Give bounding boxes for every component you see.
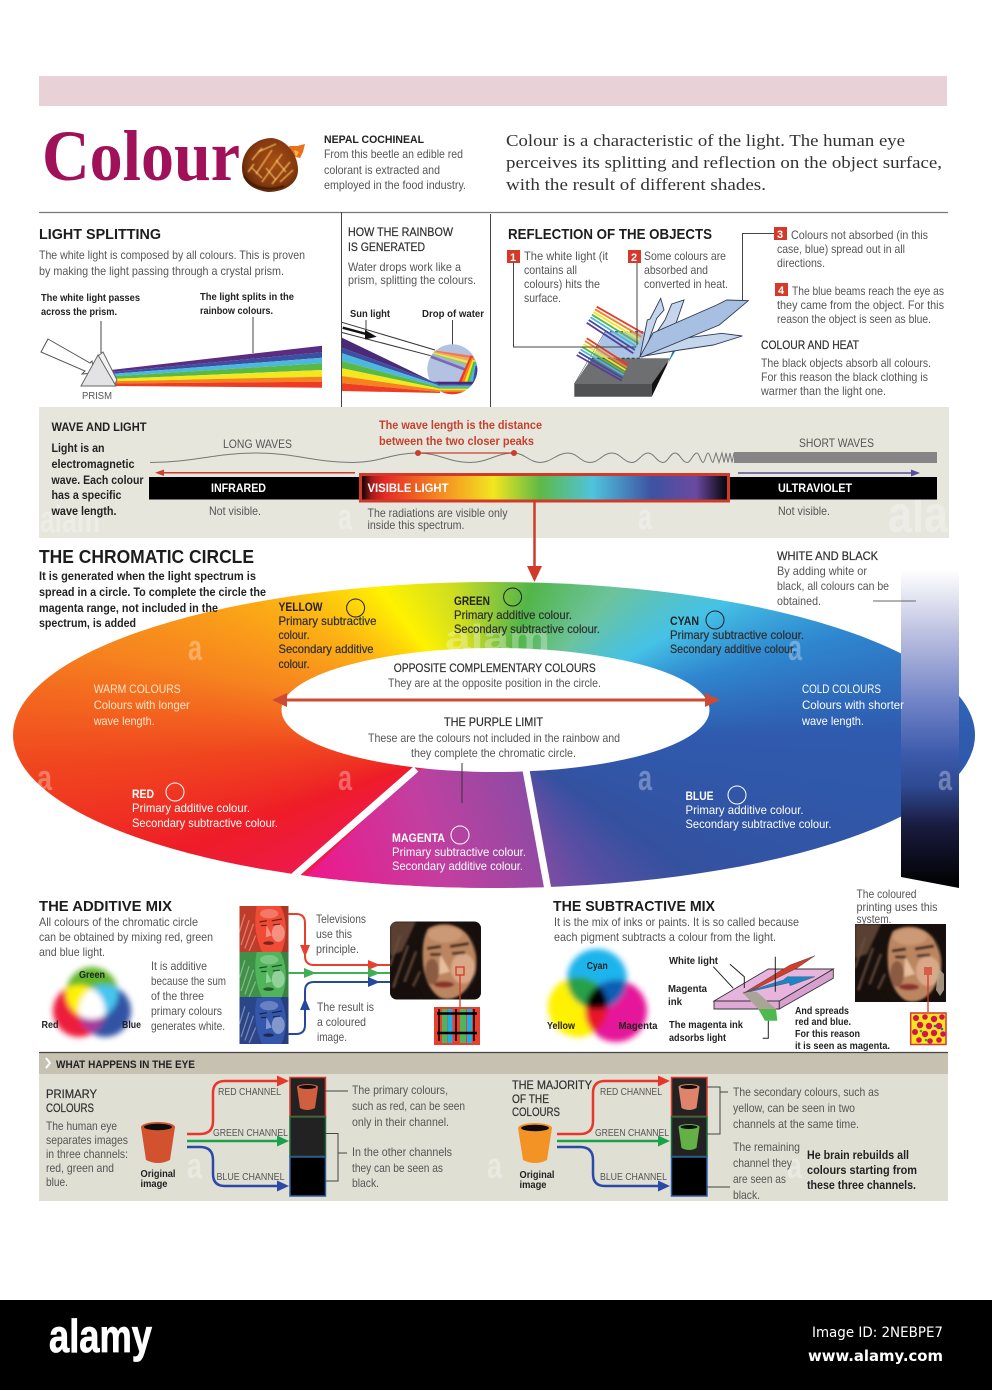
notes right: are seen as [733, 1172, 786, 1186]
chart: additive circles [42, 967, 141, 1037]
inner ellipse [282, 648, 710, 772]
text block: wave. Each colour [51, 473, 144, 487]
icon: chevron [46, 1058, 50, 1068]
channel labels right [595, 1086, 669, 1183]
label: cyan: Secondary additive colour. [670, 642, 796, 656]
label: yellow: Primary subtractive [278, 614, 377, 628]
icon: orange bucket [518, 1123, 555, 1191]
sun beam [342, 322, 435, 356]
heading: THE CHROMATIC CIRCLE [39, 547, 254, 567]
watermark [187, 1145, 803, 1186]
colour and heat: COLOUR AND HEAT [761, 338, 860, 352]
colour and heat: For this reason the black clothing is [761, 370, 928, 384]
callout: brain: colours starting from [807, 1163, 917, 1177]
channel labels right: BLUE CHANNEL [600, 1171, 667, 1183]
opposite complementary: OPPOSITE COMPLEMENTARY COLOURS [394, 661, 596, 675]
text: nepal cochineal: NEPAL COCHINEAL [324, 134, 424, 146]
pink title band [39, 76, 947, 106]
text: nepal cochineal: colorant is extracted and [324, 163, 440, 177]
channel boxes right [672, 1078, 707, 1196]
notes right: The secondary colours, such as [733, 1085, 879, 1099]
watermark: a [188, 627, 203, 668]
warm colours: wave length. [93, 714, 155, 728]
label: blue: Primary additive colour. [686, 803, 804, 817]
step 2: converted in heat. [644, 277, 728, 291]
magenta wedge [306, 769, 544, 888]
watermark: a [338, 757, 353, 798]
notes right: The remaining [733, 1140, 800, 1154]
heading: REFLECTION OF THE OBJECTS [508, 226, 712, 243]
notes right: yellow, can be seen in two [733, 1101, 855, 1115]
callout: brain [807, 1148, 917, 1192]
text block: spread in a circle. To complete the circle the [39, 585, 266, 599]
label: magenta: Primary subtractive colour. [392, 845, 526, 859]
label: red [132, 783, 278, 830]
title: Colour [42, 116, 240, 196]
white and black: obtained. [777, 594, 821, 608]
chart: additive circles: Red [42, 1020, 58, 1031]
channel labels left: GREEN CHANNEL [213, 1127, 288, 1139]
purple limit gaps [294, 769, 548, 890]
white and black: black, all colours can be [777, 579, 889, 593]
chart: additive circles: Green [79, 970, 105, 981]
spectrum captions: Not visible. [778, 504, 830, 518]
label: magenta: MAGENTA [392, 831, 445, 845]
primary colours text: in three channels: [46, 1147, 128, 1161]
watermark: ala [888, 486, 949, 544]
text block: spectrum, is added [39, 616, 136, 630]
tinted face strips [240, 906, 288, 1044]
watermark [37, 617, 953, 798]
channel boxes left [290, 1078, 326, 1196]
watermark: a [37, 757, 53, 798]
channel labels left [213, 1086, 288, 1183]
step 1: contains all [524, 263, 577, 277]
labels: plate: Magenta [668, 983, 707, 995]
labels [350, 308, 484, 345]
arrow: opposite colours [272, 693, 720, 707]
panel: additive mix [39, 898, 481, 1045]
icon: orange bucket: Original [520, 1170, 555, 1181]
purple limit: they complete the chromatic circle. [411, 746, 576, 760]
chart: subtractive circles: Magenta [618, 1021, 658, 1032]
text block [348, 260, 476, 287]
labels: plate: And spreads [795, 1005, 849, 1017]
callout: splits: rainbow colours. [200, 305, 273, 317]
channel labels left: RED CHANNEL [218, 1086, 281, 1098]
labels: plate: it is seen as magenta. [795, 1040, 890, 1052]
majority heading: THE MAJORITY [512, 1078, 592, 1092]
chart: subtractive circles [547, 949, 658, 1042]
panel: light splitting [39, 226, 322, 402]
text: televisions: principle. [316, 942, 359, 956]
icon: red bucket: image [140, 1179, 168, 1190]
text block [39, 915, 213, 959]
text block: by making the light passing through a crystal prism. [39, 264, 284, 278]
arrow: ultraviolet direction [738, 470, 920, 476]
spectrum bar: VISIBLE LIGHT [368, 481, 449, 495]
labels: Sun light [350, 308, 390, 320]
text block [39, 248, 305, 278]
text block: magenta range, not included in the [39, 601, 218, 615]
text: printing: printing uses this [856, 900, 938, 914]
text: additive note: generates white. [151, 1019, 225, 1033]
step 4: The blue beams reach the eye as [792, 284, 944, 298]
text: additive note: primary colours [151, 1004, 222, 1018]
heading: WHAT HAPPENS IN THE EYE [56, 1059, 195, 1071]
wave line [150, 450, 937, 463]
channel labels left: BLUE CHANNEL [216, 1171, 285, 1183]
text block: Water drops work like a [348, 260, 461, 274]
notes left: The primary colours, [352, 1083, 448, 1097]
spectrum captions: Not visible. [209, 504, 261, 518]
step 4: 4 [778, 285, 785, 297]
callout: white light [41, 292, 140, 357]
text: televisions: use this [316, 927, 352, 941]
colour and heat: The black objects absorb all colours. [761, 356, 931, 370]
white and black: By adding white or [777, 564, 867, 578]
text block [39, 569, 266, 630]
white and black [777, 549, 916, 608]
labels: plate: For this reason [795, 1028, 860, 1040]
callout: wave length: The wave length is the distance [379, 418, 542, 432]
text: nepal cochineal: employed in the food industry. [324, 178, 466, 192]
spectrum beam [111, 346, 322, 388]
callout: white light: The white light passes [41, 292, 140, 304]
text block: wave length. [51, 504, 117, 518]
labels: plate: The magenta ink [669, 1019, 743, 1031]
step 2: 2 [631, 252, 637, 264]
heading: IS GENERATED [348, 240, 425, 254]
footer logo: alamy [49, 1310, 152, 1362]
label: magenta: Secondary additive colour. [392, 859, 523, 873]
icon: red bucket: Original [140, 1169, 176, 1180]
arrows: rgb channels [288, 914, 390, 1034]
callout: splits [200, 291, 294, 353]
notes left [325, 1083, 465, 1190]
photo: colour face [390, 922, 481, 1000]
step 3: Colours not absorbed (in this [791, 228, 928, 242]
spectrum captions: inside this spectrum. [368, 518, 464, 532]
text: printing [856, 887, 938, 926]
panel: what happens in the eye [39, 1052, 948, 1202]
prism [81, 352, 117, 402]
arrows: channels right [557, 1076, 670, 1192]
footer bar [0, 1300, 992, 1390]
primary colours text: The human eye [46, 1119, 117, 1133]
text: result [317, 1000, 374, 1044]
labels: plate [668, 955, 890, 1052]
primary colours text: blue. [46, 1175, 68, 1189]
step 4: they came from the object. For this [777, 298, 944, 312]
arrow: from spectrum [527, 502, 542, 582]
watermark: a [487, 1145, 503, 1186]
text: nepal cochineal: From this beetle an edible red [324, 147, 463, 161]
step 4 [775, 283, 944, 326]
notes left: such as red, can be seen [352, 1099, 465, 1113]
step 3: case, blue) spread out in all [777, 242, 905, 256]
channel labels right: GREEN CHANNEL [595, 1127, 669, 1139]
text block: has a specific [52, 488, 122, 502]
arrow: infrared direction [155, 470, 355, 476]
step 2: absorbed and [644, 263, 708, 277]
illustration: ink plate [713, 956, 833, 1038]
label: yellow: colour. [278, 657, 310, 671]
text: result: a coloured [317, 1015, 366, 1029]
label: cyan [670, 611, 804, 656]
colour and heat [760, 338, 931, 398]
majority heading: COLOURS [512, 1105, 560, 1119]
spectrum captions [209, 504, 830, 532]
panel: reflection [507, 226, 944, 398]
primary colours text: COLOURS [46, 1101, 94, 1115]
watermark: alam [40, 499, 100, 541]
cold colours [801, 682, 904, 728]
notes left: black. [352, 1176, 379, 1190]
icon: red bucket [140, 1122, 176, 1190]
watermark: a [638, 496, 653, 537]
cold colours: wave length. [801, 714, 864, 728]
heading: THE ADDITIVE MIX [39, 898, 172, 915]
callout: white light: across the prism. [41, 306, 117, 318]
warm colours [93, 682, 190, 728]
label: green [454, 588, 600, 636]
intro text: with the result of different shades. [506, 175, 766, 194]
labels: plate: ink [668, 996, 682, 1008]
heading: LIGHT SPLITTING [39, 226, 161, 243]
wave labels: LONG WAVES [223, 437, 292, 451]
callout: brain: He brain rebuilds all [807, 1148, 909, 1162]
halftone magnifier [911, 967, 946, 1044]
step 2: Some colours are [644, 249, 726, 263]
spectrum bar [149, 474, 937, 501]
step 3: 3 [777, 229, 783, 241]
purple limit: THE PURPLE LIMIT [444, 715, 544, 729]
header [42, 116, 942, 196]
labels: plate: White light [669, 955, 718, 967]
icon: orange bucket: image [520, 1180, 547, 1191]
rainbow spectrum [342, 338, 478, 395]
callout: wave length: between the two closer peaks [379, 434, 534, 448]
label: green: Secondary subtractive colour. [454, 622, 600, 636]
primary colours text [46, 1087, 128, 1189]
text: additive note: It is additive [151, 959, 207, 973]
wave labels: SHORT WAVES [799, 436, 874, 450]
wave labels [223, 436, 874, 451]
footer url: www.alamy.com [808, 1347, 943, 1365]
notes right: black. [733, 1188, 760, 1202]
label: yellow [278, 599, 377, 671]
label: blue: Secondary subtractive colour. [686, 817, 832, 831]
label: red: RED [132, 787, 154, 801]
text: televisions: Televisions [316, 912, 366, 926]
footer image id: Image ID: 2NEBPE7 [812, 1325, 943, 1341]
step 1: 1 [510, 252, 516, 264]
heading: THE SUBTRACTIVE MIX [553, 898, 715, 915]
text block: and blue light. [39, 945, 105, 959]
labels: plate: adsorbs light [669, 1032, 726, 1044]
notes left: In the other channels [352, 1145, 452, 1159]
watermark: a [338, 496, 353, 537]
primary colours text: red, green and [46, 1161, 114, 1175]
step 1 [507, 249, 636, 347]
labels: plate: red and blue. [795, 1016, 851, 1028]
step 3: directions. [777, 256, 825, 270]
step 1: surface. [524, 291, 561, 305]
watermark: a [788, 627, 803, 668]
step 3 [742, 227, 928, 300]
text: result: The result is [317, 1000, 374, 1014]
label: cyan: CYAN [670, 614, 699, 628]
icon: cochineal beetle [242, 138, 305, 192]
text: additive note: of the three [151, 989, 204, 1003]
text: additive note [151, 959, 226, 1033]
heading: WAVE AND LIGHT [52, 420, 147, 434]
white and black: WHITE AND BLACK [777, 549, 878, 563]
callout: brain: these three channels. [807, 1178, 916, 1192]
notes left: they can be seen as [352, 1161, 443, 1175]
heading: HOW THE RAINBOW [348, 225, 454, 239]
purple limit [368, 715, 620, 803]
heading [348, 225, 454, 254]
watermark: a [638, 757, 653, 798]
arrows: channels left [187, 1076, 289, 1192]
panel: wave and light [39, 407, 949, 544]
callout: wave length [379, 418, 542, 448]
label: yellow: colour. [278, 628, 310, 642]
opposite complementary: They are at the opposite position in the circle. [388, 676, 601, 690]
panel: subtractive mix [547, 887, 946, 1052]
intro text: Colour is a characteristic of the light. The human eye [506, 131, 905, 150]
text: result: image. [317, 1030, 347, 1044]
step 1: The white light (it [524, 249, 609, 263]
label: yellow: Secondary additive [278, 642, 374, 656]
step 4: reason the object is seen as blue. [777, 312, 931, 326]
primary colours text: separates images [46, 1133, 128, 1147]
label: blue [686, 786, 832, 831]
text block: prism, splitting the colours. [348, 273, 476, 287]
majority heading: OF THE [512, 1092, 549, 1106]
label: green: Primary additive colour. [454, 608, 572, 622]
chart: subtractive circles: Cyan [587, 961, 608, 972]
text block: each pigment subtracts a colour from the light. [554, 930, 776, 944]
arrow: incoming white light [41, 339, 94, 374]
notes left: only in their channel. [352, 1115, 449, 1129]
photo: printed face [855, 924, 946, 1002]
watermark: a [187, 1145, 203, 1186]
intro text [506, 131, 942, 194]
water drop [427, 344, 478, 394]
labels: Drop of water [422, 308, 484, 320]
notes right [707, 1085, 879, 1202]
text: televisions [316, 912, 366, 956]
cold colours: Colours with shorter [802, 698, 904, 712]
pixel magnifier [434, 967, 480, 1045]
panel: chromatic circle [37, 502, 959, 892]
chromatic ring [13, 582, 975, 888]
label: cyan: Primary subtractive colour. [670, 628, 804, 642]
text block: All colours of the chromatic circle [39, 915, 198, 929]
purple limit: These are the colours not included in the rainbow and [368, 731, 620, 745]
spectrum captions: The radiations are visible only [368, 506, 508, 520]
text block: can be obtained by mixing red, green [39, 930, 213, 944]
majority heading [512, 1078, 592, 1119]
colour and heat: warmer than the light one. [760, 384, 886, 398]
primary colours text: PRIMARY [46, 1087, 97, 1101]
text block: It is the mix of inks or paints. It is so called because [554, 915, 799, 929]
text: additive note: because the sum [151, 974, 226, 988]
watermark: alam [445, 617, 550, 658]
notes right: channels at the same time. [733, 1117, 859, 1131]
step 1: colours) hits the [524, 277, 600, 291]
text: printing: The coloured [856, 887, 916, 901]
text block: The white light is composed by all colours. This is proven [39, 248, 305, 262]
text block [554, 915, 799, 944]
spectrum bar: ULTRAVIOLET [778, 481, 853, 495]
step 2 [628, 249, 728, 345]
notes right: channel they [733, 1156, 792, 1170]
label: red: Secondary subtractive colour. [132, 816, 278, 830]
prism: PRISM [82, 391, 112, 402]
text: printing: system. [856, 912, 892, 926]
label: red: Primary additive colour. [132, 801, 250, 815]
watermark [40, 486, 949, 544]
label: green: GREEN [454, 594, 490, 608]
watermark: a [787, 1145, 803, 1186]
text block: It is generated when the light spectrum is [39, 569, 256, 583]
cold colours: COLD COLOURS [802, 682, 881, 696]
chart: additive circles: Blue [122, 1020, 141, 1031]
watermark: a [938, 757, 953, 798]
callout: splits: The light splits in the [200, 291, 294, 303]
chart: subtractive circles: Yellow [547, 1021, 575, 1032]
panel: rainbow [342, 225, 484, 395]
illustration: block and beams [574, 298, 748, 397]
opposite complementary [388, 661, 601, 690]
text: nepal cochineal [324, 134, 466, 192]
warm colours: Colours with longer [94, 698, 190, 712]
text block: Light is an [52, 441, 104, 455]
text block [51, 441, 144, 518]
label: magenta [392, 826, 526, 873]
text block: electromagnetic [52, 457, 135, 471]
intro text: perceives its splitting and reflection on the object surface, [506, 153, 942, 172]
label: blue: BLUE [686, 789, 714, 803]
channel labels right: RED CHANNEL [600, 1086, 662, 1098]
stripe: white and black [901, 570, 959, 888]
warm colours: WARM COLOURS [94, 682, 181, 696]
label: yellow: YELLOW [278, 600, 323, 614]
spectrum bar: INFRARED [211, 481, 266, 495]
